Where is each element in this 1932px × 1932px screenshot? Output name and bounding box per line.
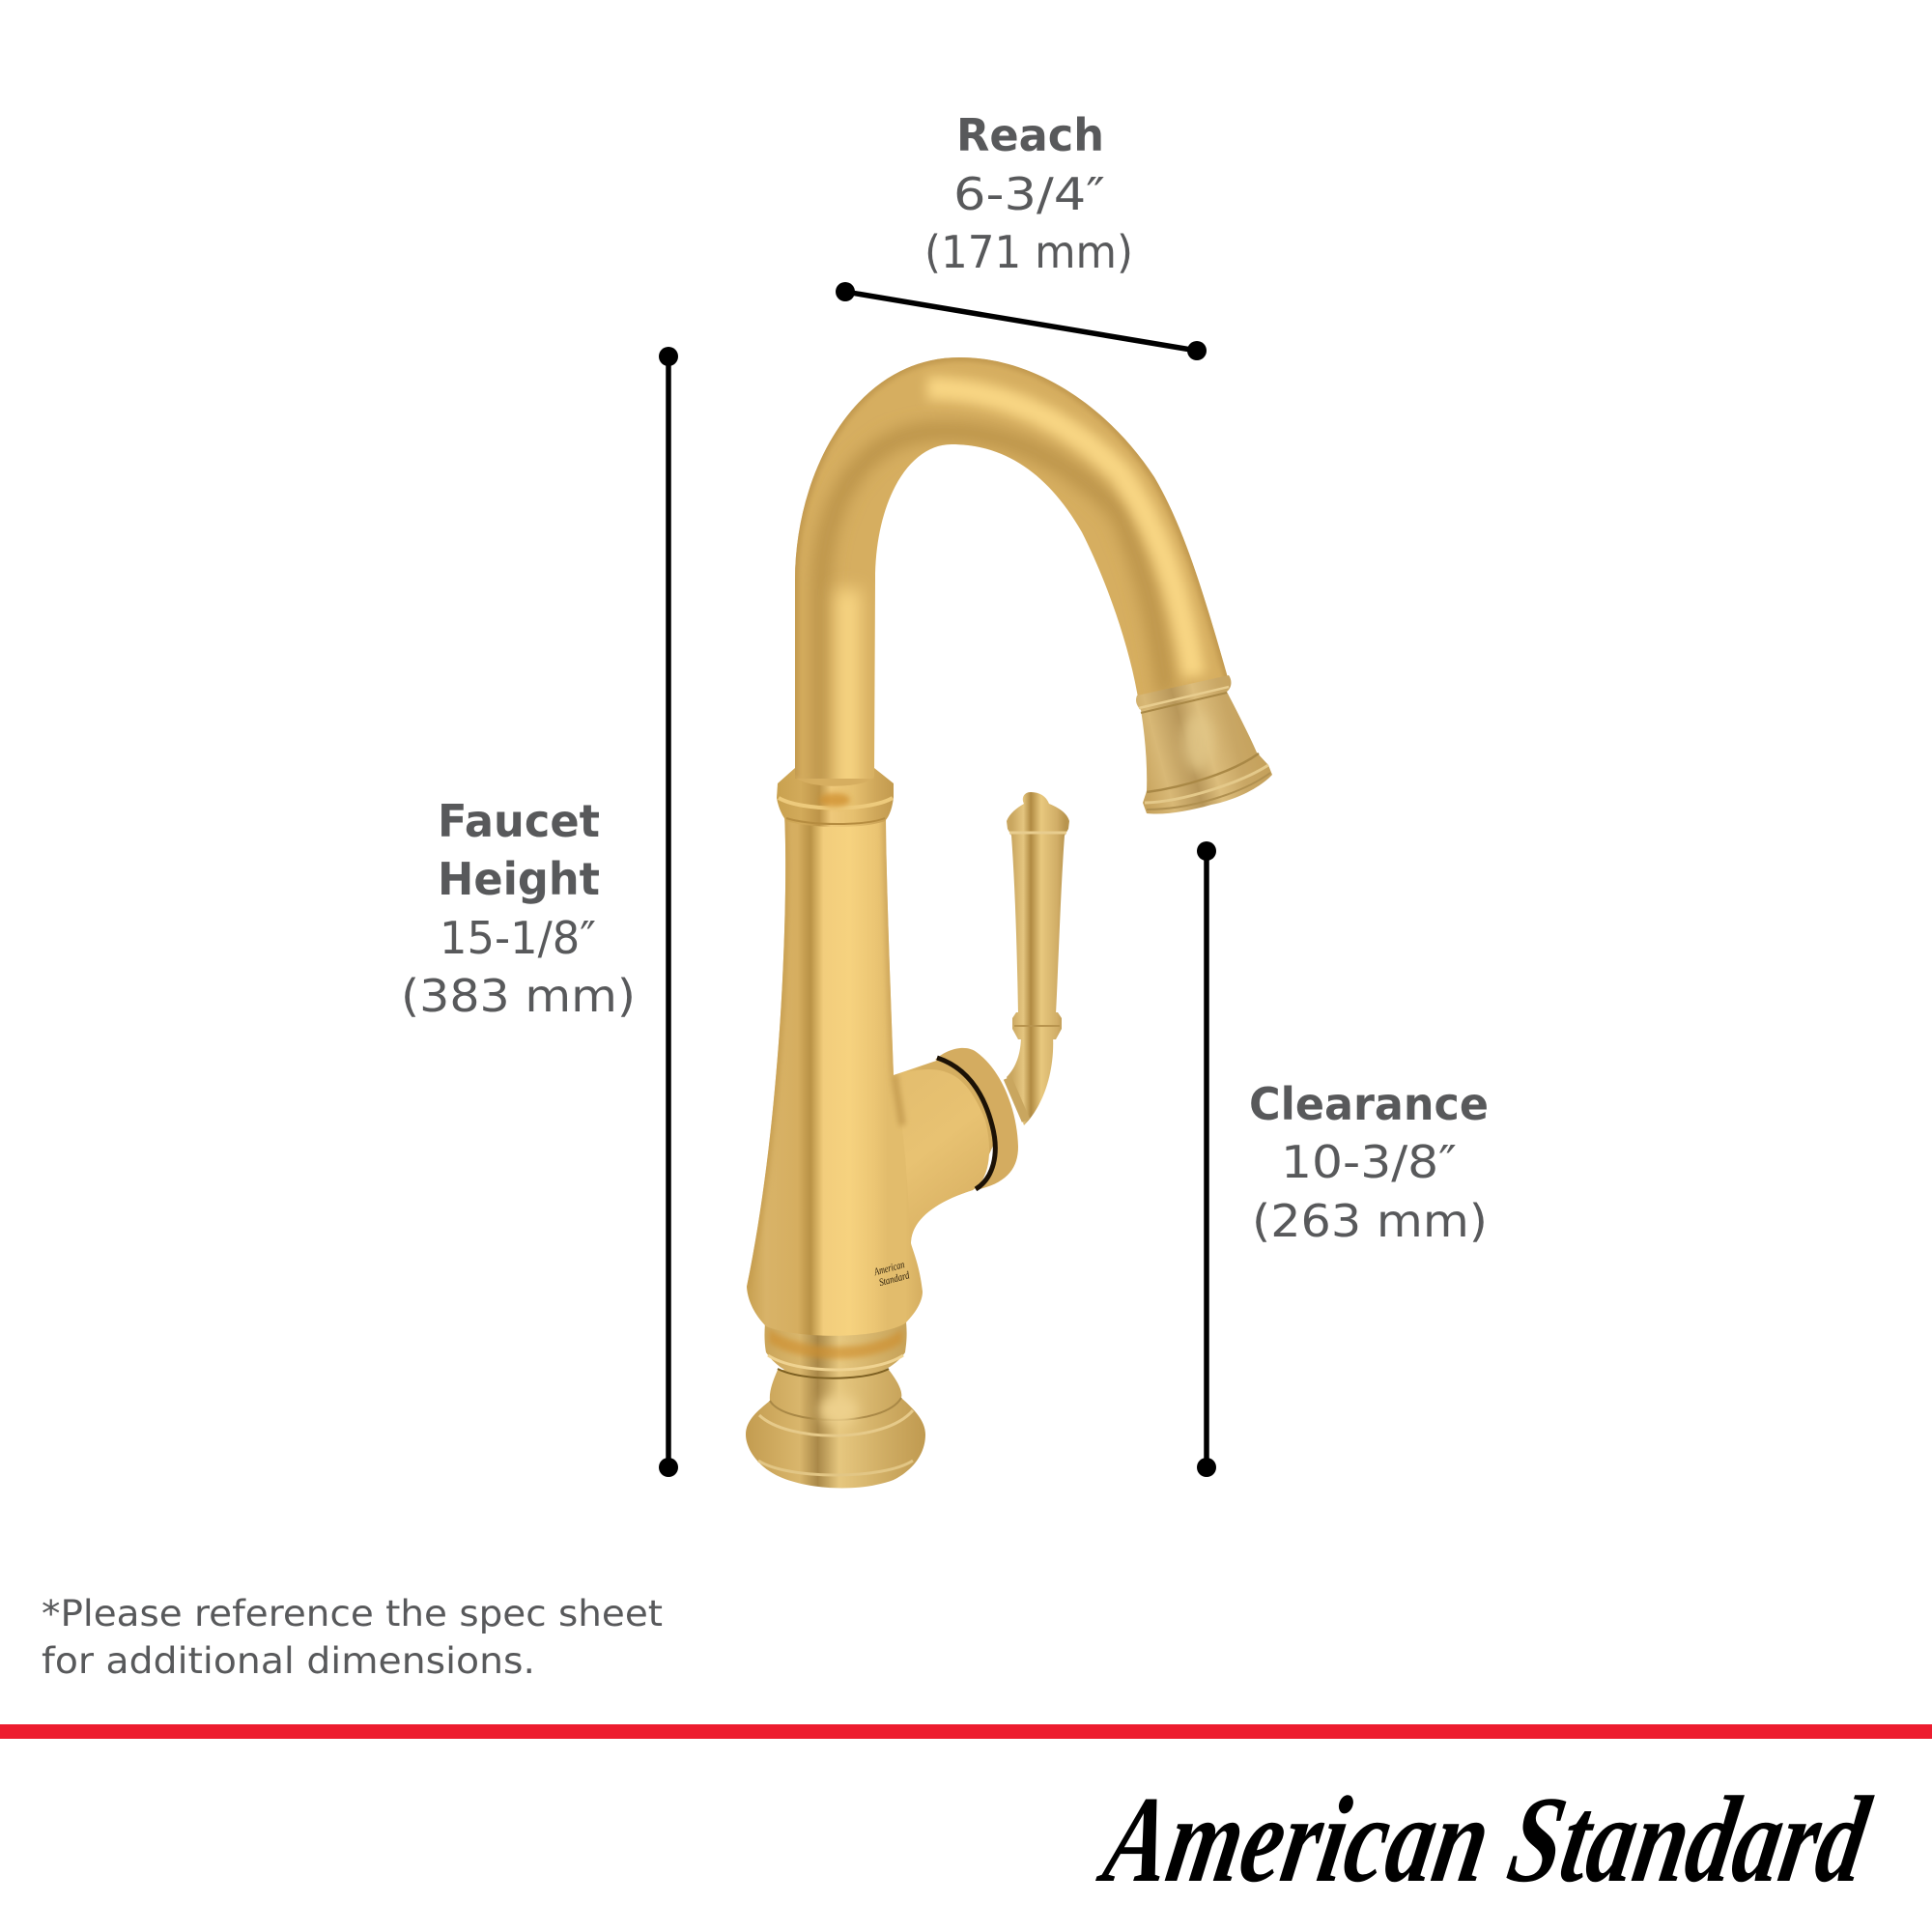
reach label: 6-3/4″	[953, 168, 1105, 220]
height end dot top	[659, 347, 678, 366]
dimension: reach	[836, 109, 1207, 360]
clearance line	[1204, 851, 1209, 1467]
reach end dot right	[1187, 341, 1207, 360]
clearance label	[1249, 1078, 1489, 1247]
dimension: clearance	[1197, 841, 1489, 1477]
spout head	[1136, 675, 1272, 814]
handle hub	[935, 1048, 1018, 1190]
dimension: faucet height	[401, 347, 678, 1477]
footnote: *Please reference the spec sheet	[42, 1593, 663, 1634]
reach line	[845, 292, 1197, 351]
height end dot bottom	[659, 1458, 678, 1477]
spout	[795, 357, 1229, 802]
reach label	[924, 109, 1133, 278]
reach label: (171 mm)	[924, 226, 1133, 278]
product logo on faucet: Standard	[878, 1269, 911, 1289]
base foot	[746, 1370, 925, 1488]
collar	[777, 768, 894, 827]
height label: Faucet	[438, 795, 600, 847]
footnote: for additional dimensions.	[42, 1640, 535, 1682]
product logo on faucet	[872, 1259, 911, 1290]
height label: 15-1/8″	[440, 912, 596, 964]
base ring	[765, 1314, 907, 1381]
main body	[747, 811, 1005, 1336]
height label	[401, 795, 636, 1022]
height label: (383 mm)	[401, 970, 636, 1022]
product logo on faucet: American	[872, 1259, 906, 1278]
clearance end dot top	[1197, 841, 1216, 861]
handle lever	[1007, 792, 1069, 1125]
clearance label: (263 mm)	[1252, 1195, 1488, 1247]
clearance end dot bottom	[1197, 1458, 1216, 1477]
height line	[666, 356, 671, 1467]
clearance label: Clearance	[1249, 1078, 1489, 1130]
faucet illustration	[746, 357, 1272, 1488]
height label: Height	[438, 853, 600, 905]
reach label: Reach	[956, 109, 1104, 161]
reach end dot left	[836, 282, 855, 301]
footnote	[42, 1593, 663, 1682]
clearance label: 10-3/8″	[1281, 1136, 1457, 1188]
red divider bar	[0, 1724, 1932, 1739]
